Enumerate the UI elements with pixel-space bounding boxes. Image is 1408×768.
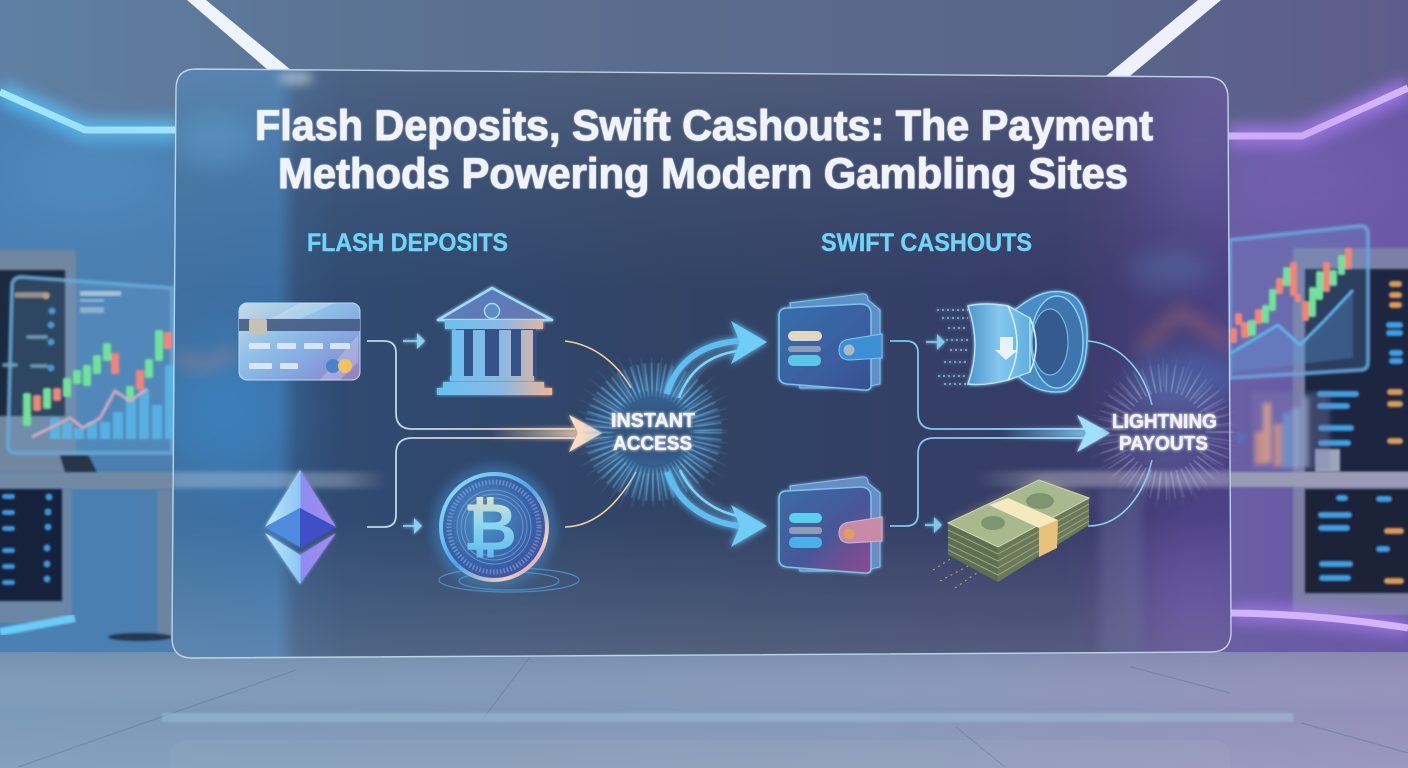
roof [438,288,552,320]
floor panel reflection [170,740,1230,768]
right desk [1228,472,1408,487]
wallet body [779,304,871,390]
blurred desk leg [1100,488,1142,653]
wallet pills [789,513,822,523]
blurred wall glow: right [1152,112,1228,228]
heading: swift cashouts: SWIFT CASHOUTS [821,229,1032,257]
wallet clasp [839,334,882,360]
title [255,102,1153,198]
ceiling light: right [1106,0,1221,76]
right workstation [1228,226,1408,628]
card sheen [270,303,358,380]
connector: card [367,341,575,429]
entablature [445,320,543,329]
wall light wash: right [1220,140,1400,220]
right glass chart [1230,226,1368,378]
right screen readouts: orange [1384,281,1404,584]
icon: credit card [239,303,360,380]
trend line [32,389,147,437]
columns [452,330,533,377]
icon: ethereum [265,470,336,584]
arrow: cashouts to lightning payouts [890,341,1110,526]
hub label: PAYOUTS [1119,433,1208,455]
arrow: ethereum to bitcoin [403,518,422,534]
heading: flash deposits: FLASH DEPOSITS [307,229,508,257]
vertical brightness [160,60,1250,670]
neon strip glow: left [0,92,180,130]
card numbers [249,343,350,369]
wallet body [779,487,871,573]
right floor neon [1231,613,1408,628]
wallet pills [788,331,822,341]
neon strip: right [1228,88,1408,136]
hub label: ACCESS [613,433,692,455]
arrow: top wallet to vault [926,334,945,350]
left dark screen [0,270,65,416]
vault ring [1008,306,1017,380]
icon: cash stack [933,480,1089,588]
icon: bank [437,288,552,395]
left monitor frame [0,250,76,472]
coin ripple [439,568,579,592]
hub core [609,406,697,458]
bill emblems [1026,493,1054,509]
ceiling light: left [187,0,291,70]
blurred candle tint: right [1140,312,1232,350]
connector: cash to hub [1088,460,1152,526]
hub rays [591,370,715,494]
glass base [160,60,1250,670]
blurred desk line: right [975,471,1231,487]
left screen readouts [2,292,56,372]
glass panel [160,60,1250,670]
candles [23,330,172,426]
chart caption [80,291,121,296]
neon strip: left [0,92,180,130]
icon: bitcoin [432,465,579,592]
data stream [937,310,968,384]
connector: bitcoin to hub [565,472,636,527]
roof emblem [484,304,500,318]
left monitor stand [60,455,97,472]
hub core [1109,406,1221,458]
floor [0,652,1408,768]
hub rays [1103,370,1227,494]
card chip [249,319,267,334]
connector: vault to hub [1088,341,1152,405]
coin body [441,474,547,580]
left lower monitor [0,489,72,623]
blurred ceiling light through glass [278,71,314,85]
neon strip glow: right [1228,88,1408,136]
left desk foot [108,633,172,641]
floor tile seams [18,657,1408,767]
desk cup [1315,449,1340,472]
arrow: deposits to instant access [367,341,602,527]
icon: top wallet [779,294,882,390]
wall light wash: left [0,135,180,215]
lower monitor readouts [2,494,52,585]
left desk [0,472,180,489]
card logo [326,359,340,373]
vault tube [968,304,1030,384]
background bars [1238,392,1330,470]
coin engraved rings [449,482,539,572]
stack sides [948,523,998,582]
right floor neon glow [1231,613,1408,628]
hub: lightning payouts [1100,367,1230,497]
arrow: bottom wallet to cash [925,517,942,533]
left desk leg [157,489,175,637]
hub label: INSTANT [611,410,695,432]
connector: bottom wallet [890,438,1085,526]
arrow: hub to bottom wallet [667,470,767,547]
connector: top wallet [890,341,1085,429]
left glass chart [8,277,175,453]
trend line [1231,290,1353,353]
hub label [611,410,695,455]
panel edge [172,69,1231,658]
coin glyph: ₿ [463,489,517,566]
left workstation [0,250,180,641]
hub glow [1100,367,1230,497]
coin glow [432,465,556,589]
blurred desk line: left [172,472,387,488]
hub label: LIGHTNING [1112,411,1217,433]
arrow: card to bank [403,333,425,349]
right screen readouts: blue [1317,322,1403,581]
wallet clasp [839,517,882,543]
motion sparks [933,556,978,588]
chart area [1231,290,1353,372]
connector glow [1000,428,1086,439]
arrowhead [1077,415,1110,452]
ceiling [0,0,1408,136]
vault down arrow [995,337,1018,360]
volume bars [50,365,175,439]
hub: instant access [581,360,725,504]
connector: bank to hub [565,341,631,388]
arrow: hub to top wallet [667,321,767,398]
bill top [948,480,1089,547]
icon: digital vault [937,292,1087,392]
blurred candle tint: left [176,350,235,364]
connector: ethereum [367,438,575,527]
hub label [1112,411,1217,455]
money band [989,498,1058,528]
blurred wall glow: left [165,345,285,475]
left floor neon [0,618,75,632]
wallet pages [790,477,880,571]
wallet pages [790,294,880,388]
interior [456,329,536,377]
steps [437,376,552,395]
stack glow [948,480,1089,547]
connector glow [490,428,578,439]
arrowhead [569,415,602,452]
right monitor frame [1293,248,1408,615]
title: Flash Deposits, Swift Cashouts: The Payment [255,102,1153,150]
card stripe [239,319,360,331]
title: Methods Powering Modern Gambling Sites [278,150,1128,198]
right dark upper screen [1305,269,1408,472]
hub glow [581,360,725,504]
icon: bottom wallet [779,477,882,573]
right dark lower screen [1305,489,1408,593]
vault rear drum [1015,292,1087,392]
floor reflected light strip [162,713,1293,722]
candles [1230,248,1352,343]
